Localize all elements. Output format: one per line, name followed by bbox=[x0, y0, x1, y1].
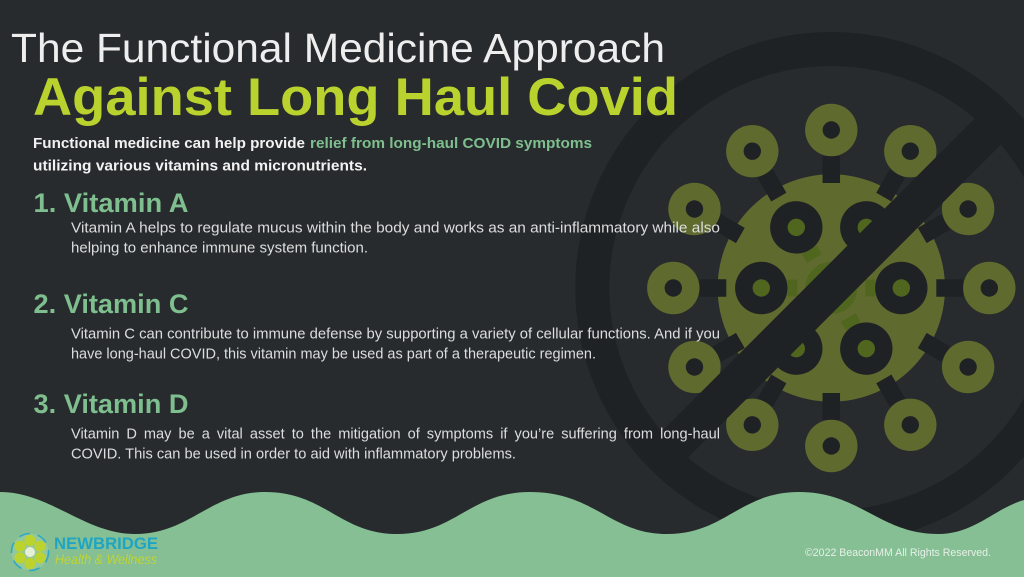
body: Vitamin D bbox=[71, 426, 720, 462]
intro text: Functional medicine can help provide bbox=[33, 135, 305, 152]
icon: crossed-out virus bbox=[592, 49, 1024, 527]
body: Vitamin C: Vitamin C can contribute to immune defense by supporting a variety of cellular functions. And if you bbox=[71, 326, 720, 342]
body: Vitamin A: Vitamin A helps to regulate mucus within the body and works as an anti-inflammatory while also bbox=[71, 220, 720, 236]
intro text bbox=[33, 135, 592, 174]
intro text: utilizing various vitamins and micronutrients. bbox=[33, 158, 367, 174]
title line 1: The Functional Medicine Approach bbox=[11, 25, 665, 71]
heading: Vitamin D: 3. Vitamin D bbox=[34, 389, 188, 419]
section: Vitamin C bbox=[34, 289, 720, 362]
logo mark bbox=[12, 534, 48, 570]
section: Vitamin D bbox=[34, 389, 720, 462]
logo tagline: Health & Wellness bbox=[55, 551, 157, 567]
green wave footer bbox=[0, 492, 1024, 577]
prohibition ring bbox=[592, 49, 1024, 527]
logo wordmark: NEWBRIDGE bbox=[54, 534, 158, 553]
body: Vitamin C: have long-haul COVID, this vitamin may be used as part of a therapeutic regimen. bbox=[71, 346, 596, 362]
body: Vitamin D: COVID. This can be used in order to aid with inflammatory problems. bbox=[71, 446, 516, 462]
title line 2: Against Long Haul Covid bbox=[33, 68, 678, 127]
virus body bbox=[647, 104, 1016, 472]
body: Vitamin C bbox=[71, 326, 720, 362]
body: Vitamin A: helping to enhance immune system function. bbox=[71, 240, 368, 256]
copyright: ©2022 BeaconMM All Rights Reserved. bbox=[805, 547, 991, 559]
body: Vitamin D: Vitamin D may be a vital asset to the mitigation of symptoms if you’re suffering from long-haul bbox=[71, 426, 720, 442]
logo: Newbridge Health & Wellness bbox=[12, 534, 158, 570]
heading: Vitamin C: 2. Vitamin C bbox=[34, 289, 188, 319]
intro text: relief from long-haul COVID symptoms bbox=[310, 135, 592, 152]
heading: Vitamin A: 1. Vitamin A bbox=[34, 188, 188, 218]
body: Vitamin A bbox=[71, 220, 720, 256]
section: Vitamin A bbox=[34, 188, 720, 256]
prohibition slash bbox=[662, 118, 1001, 458]
